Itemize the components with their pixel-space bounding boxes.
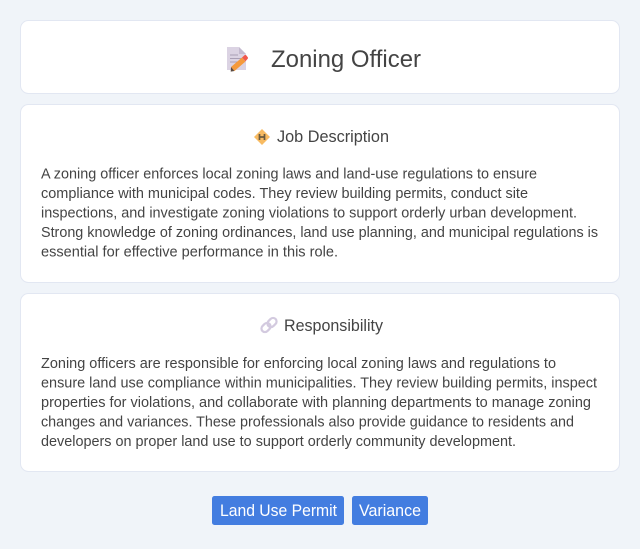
heading: responsibility: Responsibility — [284, 317, 384, 335]
text block: responsibility: properties for violations, and collaborate with planning departments to manage zoning — [41, 395, 591, 411]
tag: land use permit — [212, 496, 344, 525]
icon: document with pencil — [227, 47, 248, 72]
text block: job description: A zoning officer enforces local zoning laws and land-use regulations to ensure — [41, 166, 537, 182]
text block: responsibility — [41, 356, 597, 450]
text block: job description: inspections, and investigate zoning violations to support orderly urban development. — [41, 206, 577, 222]
icon: chain link — [260, 316, 278, 334]
text block: job description — [41, 166, 598, 260]
panel: job description — [20, 104, 620, 282]
panel: title card — [20, 20, 620, 94]
text block: responsibility: developers on proper land use to support orderly community development. — [41, 434, 516, 450]
text block: responsibility: changes and variances. These professionals also provide guidance to residents and — [41, 414, 574, 430]
panel: responsibility — [20, 294, 620, 472]
text block: responsibility: Zoning officers are responsible for enforcing local zoning laws and regulations to — [41, 356, 556, 372]
heading: job description: Job Description — [277, 128, 389, 146]
tag: variance: Variance — [359, 502, 421, 520]
tag: variance — [352, 496, 428, 525]
text block: job description: essential for effective performance in this role. — [41, 244, 338, 260]
text block: job description: compliance with municipal codes. They review building permits, conduct site — [41, 186, 528, 202]
title: Zoning Officer — [271, 46, 421, 73]
icon: diamond road sign — [254, 129, 270, 145]
text block: responsibility: ensure land use compliance within municipalities. They review building permits, inspect — [41, 376, 597, 392]
tag: land use permit: Land Use Permit — [220, 502, 337, 520]
text block: job description: Strong knowledge of zoning ordinances, land use planning, and municipal regulations is — [41, 225, 598, 241]
